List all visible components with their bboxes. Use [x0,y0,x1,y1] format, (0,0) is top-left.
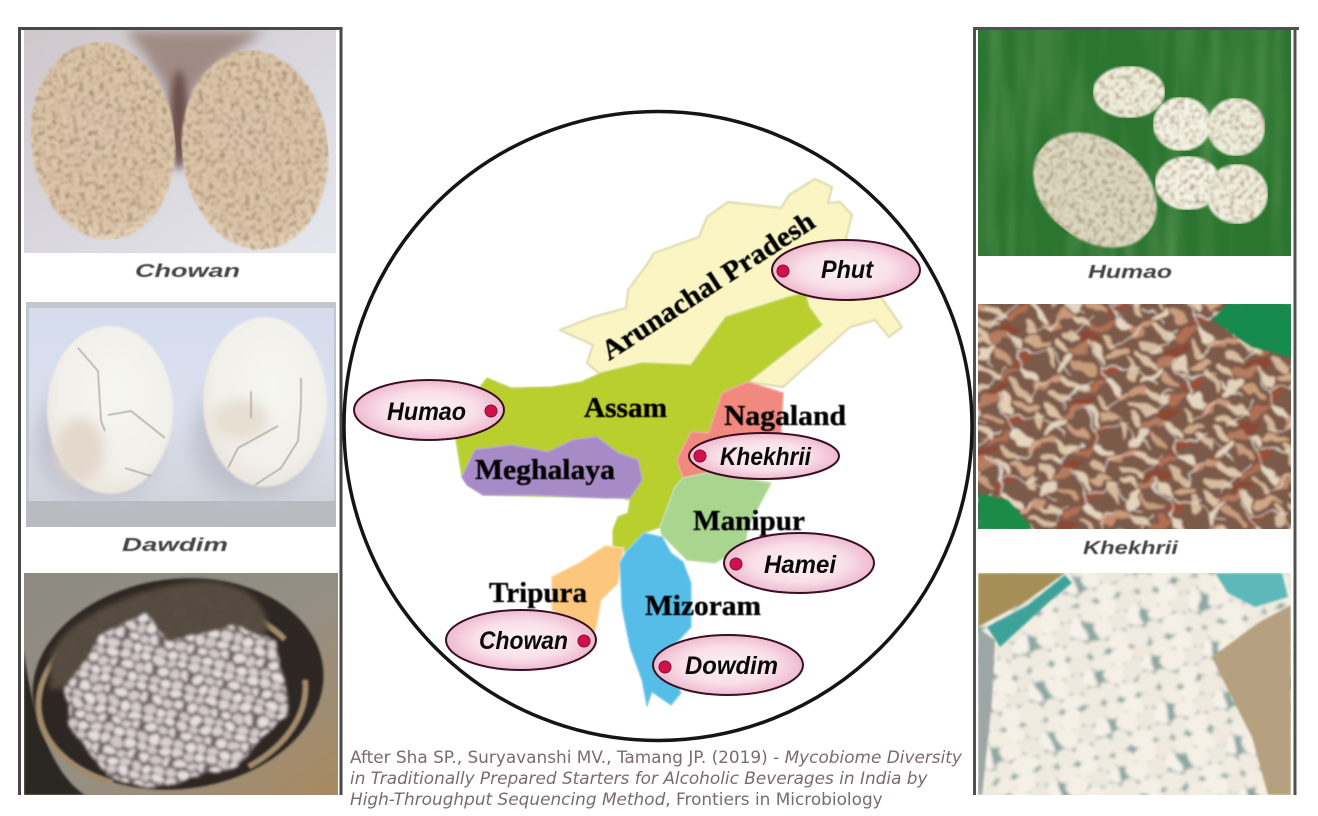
callout: Hamei [724,533,874,593]
callout: Phut [772,240,920,300]
label: Meghalaya: Meghalaya [475,455,615,486]
label: Manipur: Manipur [693,506,805,537]
callout: Humao [354,380,504,440]
caption: source citation: in Traditionally Prepared Starters for Alcoholic Beverages in India by [350,768,929,788]
photo: basket of white tablets [24,573,338,795]
callout: Chowan: Chowan [479,627,568,655]
callout: Hamei: Hamei [764,551,837,579]
map: North East India [456,179,902,706]
state: Arunachal Pradesh [560,179,902,387]
callout: Khekhrii: Khekhrii [720,443,812,471]
state: Meghalaya [462,437,642,498]
label: Dawdim: Dawdim [122,535,228,555]
label: Tripura: Tripura [489,578,587,609]
caption: source citation: After Sha SP., Suryavanshi MV., Tamang JP. (2019) - Mycobiome Diversity [350,747,963,767]
label: Arunachal Pradesh: Arunachal Pradesh [596,206,821,367]
panel: left photo column [20,28,341,806]
state: Assam [456,293,822,552]
state: Nagaland [677,382,783,478]
photo: Humao cakes on banana leaf [978,30,1291,256]
state: Manipur [660,473,771,563]
circle outline [344,112,972,740]
label: Mizoram: Mizoram [645,591,761,622]
callout: Khekhrii [689,433,839,479]
state: Mizoram [620,533,691,706]
state labels [475,206,846,622]
callout: Dowdim [653,635,803,695]
caption: source citation [350,747,963,809]
callout: Phut: Phut [821,256,875,284]
photo: Chowan cakes [21,30,338,257]
panel frame: right [974,28,1299,795]
label: Nagaland: Nagaland [724,401,846,432]
label: Chowan: Chowan [135,261,240,281]
caption: source citation: High-Throughput Sequencing Method, Frontiers in Microbiology [350,789,883,809]
label: Assam: Assam [584,393,667,424]
panel: right photo column [960,22,1305,808]
callout: Humao: Humao [387,398,466,426]
panel frame: left [20,28,341,795]
panel: central map circle [344,112,972,740]
callout: Chowan [446,610,596,670]
state: Tripura [552,546,624,632]
photo: Khekhrii germinated rice [978,304,1291,529]
label: Humao: Humao [1088,262,1172,282]
label: Khekhrii: Khekhrii [1083,538,1179,558]
callout: Dowdim: Dowdim [685,652,778,680]
photo: Dawdim cakes [26,302,336,527]
photo: white tablets with sacking [978,573,1291,795]
